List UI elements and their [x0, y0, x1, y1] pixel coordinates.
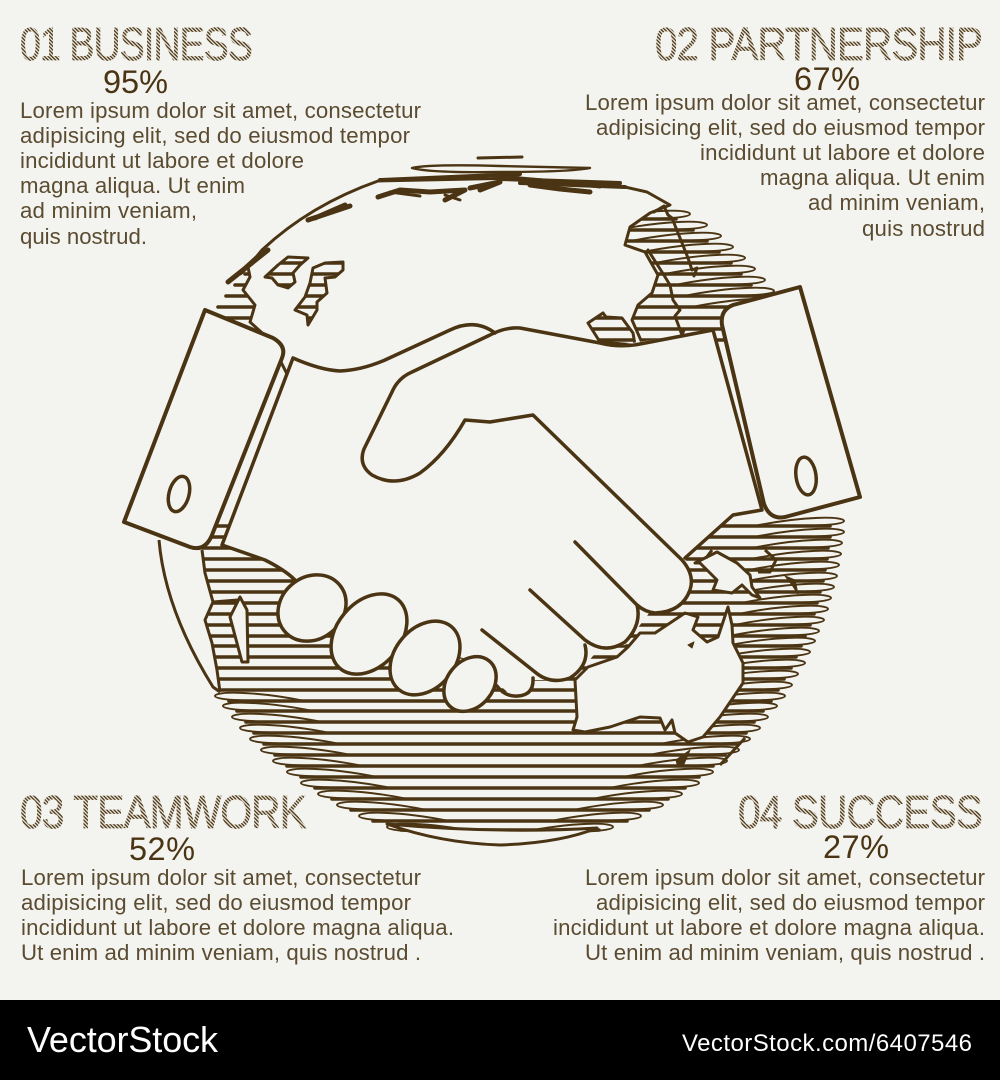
section 03 teamwork — [20, 786, 454, 965]
percentage: 95% — [103, 64, 168, 100]
right hand — [362, 328, 713, 613]
section 02 partnership — [585, 18, 986, 241]
body text: Ut enim ad minim veniam, quis nostrud . — [21, 940, 421, 965]
globe hatch lines — [170, 211, 844, 832]
left hand — [222, 325, 495, 580]
cuff button — [165, 474, 193, 514]
heading: 01 BUSINESS — [20, 18, 252, 70]
body text: adipisicing elit, sed do eiusmod tempor — [596, 115, 986, 140]
percentage: 27% — [823, 829, 889, 865]
New Guinea — [695, 552, 760, 598]
body text: quis nostrud — [862, 216, 985, 241]
continent coast details north — [228, 157, 697, 335]
south-east coast cut — [720, 738, 745, 765]
western coast and island — [159, 540, 248, 692]
body text — [553, 865, 986, 965]
footer url: VectorStock.com/6407546 — [682, 1030, 972, 1057]
blank western landmass — [140, 520, 220, 692]
body text: ad minim veniam, — [20, 198, 197, 223]
body text — [20, 98, 422, 249]
fingers of left hand — [264, 561, 507, 722]
body text: incididunt ut labore et dolore magna aliqua. — [21, 915, 454, 940]
body text: Ut enim ad minim veniam, quis nostrud . — [585, 940, 985, 965]
section 04 success — [553, 786, 986, 965]
handshake outline — [222, 325, 762, 696]
body text: Lorem ipsum dolor sit amet, consectetur — [20, 98, 422, 123]
body text: incididunt ut labore et dolore magna aliqua. — [553, 915, 985, 940]
body text: adipisicing elit, sed do eiusmod tempor — [21, 890, 412, 915]
percentage: 52% — [129, 831, 195, 867]
right cuff — [722, 287, 860, 517]
left cuff — [124, 310, 283, 548]
body text — [21, 865, 454, 965]
footer bar — [0, 1000, 1000, 1080]
body text: adipisicing elit, sed do eiusmod tempor — [596, 890, 986, 915]
Australia — [573, 607, 743, 742]
section 01 business — [20, 18, 422, 249]
percentage: 67% — [794, 61, 860, 97]
body text: magna aliqua. Ut enim — [20, 173, 245, 198]
body text: quis nostrud. — [20, 224, 147, 249]
cuff button — [793, 456, 819, 496]
body text: magna aliqua. Ut enim — [760, 165, 985, 190]
heading: 03 TEAMWORK — [20, 786, 307, 838]
body text: incididunt ut labore et dolore — [700, 140, 985, 165]
small islands — [676, 576, 798, 764]
body text — [585, 90, 986, 241]
blank northern landmass with island outlines — [243, 178, 670, 560]
handshake fill — [222, 323, 762, 696]
Australia and Oceania landmass — [573, 550, 798, 764]
body text: Lorem ipsum dolor sit amet, consectetur — [585, 90, 986, 115]
body text: ad minim veniam, — [808, 190, 985, 215]
Antarctica — [387, 824, 597, 845]
globe illustration with handshake — [124, 157, 860, 845]
body text: adipisicing elit, sed do eiusmod tempor — [20, 123, 411, 148]
body text: Lorem ipsum dolor sit amet, consectetur — [585, 865, 986, 890]
body text: Lorem ipsum dolor sit amet, consectetur — [21, 865, 422, 890]
footer logo: VectorStock — [27, 1019, 219, 1060]
body text: incididunt ut labore et dolore — [20, 148, 304, 173]
